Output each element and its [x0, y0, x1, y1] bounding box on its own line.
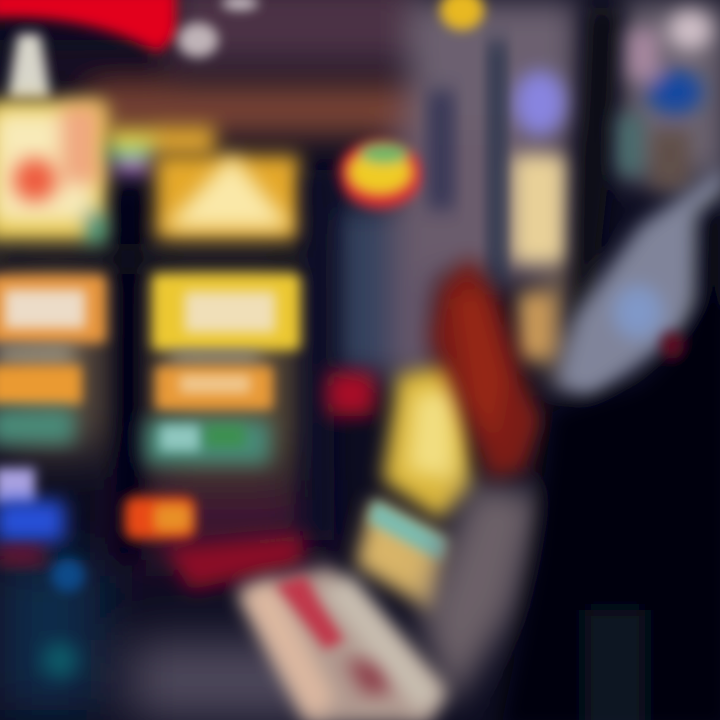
white post and ceiling light	[8, 0, 258, 98]
red canopy top left	[0, 0, 176, 52]
gray side console	[420, 480, 545, 710]
player's hair	[430, 258, 542, 478]
dark pillar	[570, 8, 622, 330]
orange-red button	[125, 497, 195, 539]
rainbow sign middle	[108, 125, 215, 174]
dark machine frames	[0, 170, 334, 560]
teal and cream lower panel	[355, 498, 448, 615]
left machine reels	[0, 275, 106, 444]
right yellow machine screen	[382, 362, 472, 520]
glow behind lower left and centre	[0, 250, 330, 720]
top right colourful machines	[618, 10, 712, 190]
far machines column	[428, 0, 566, 360]
middle machine reels	[145, 274, 300, 464]
dark red sleeve accent	[660, 331, 684, 359]
player's arm and sleeve	[555, 165, 720, 400]
dark red console strip	[165, 535, 305, 590]
keyboard deck	[238, 565, 445, 720]
left machine top screen	[0, 100, 107, 245]
lower left blue button panel	[0, 468, 85, 678]
middle machine top screen	[155, 155, 300, 240]
player's dark body	[500, 190, 720, 720]
red button on dark column	[327, 372, 375, 416]
rainbow badge	[338, 140, 422, 208]
upper background wall	[0, 0, 720, 380]
